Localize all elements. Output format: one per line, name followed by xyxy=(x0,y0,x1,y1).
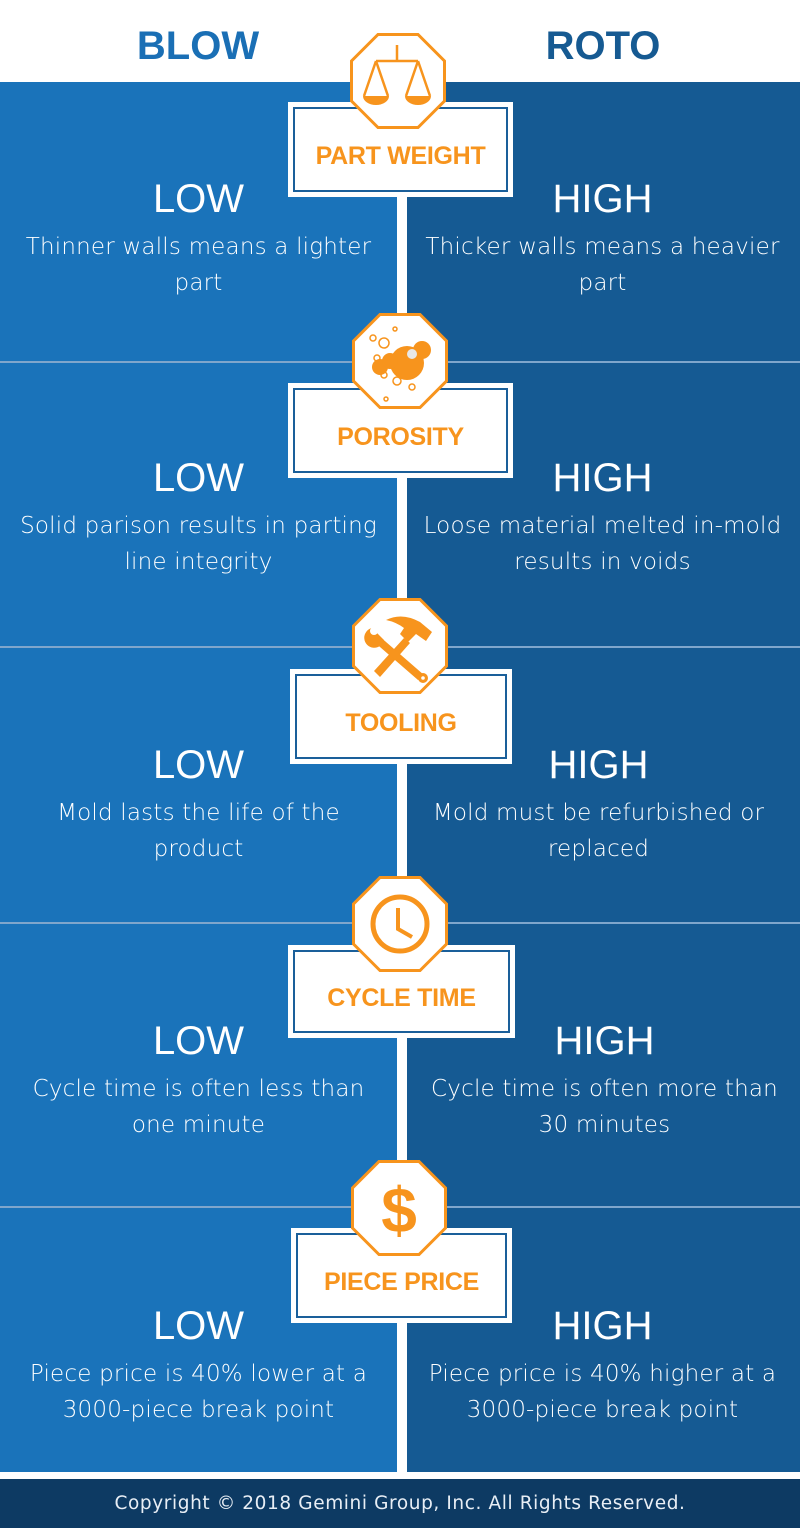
text: roto high: HIGH xyxy=(552,456,652,500)
panel: part weight xyxy=(26,33,780,296)
text: roto high xyxy=(429,1304,776,1423)
text: roto high: HIGH xyxy=(554,1019,654,1063)
label box: piece price xyxy=(291,1228,512,1323)
text: blow low: 3000-piece break point xyxy=(63,1397,334,1423)
icon: scale xyxy=(350,33,446,129)
text: roto high: replaced xyxy=(548,836,649,862)
text: roto high xyxy=(431,1019,778,1138)
text: blow low: LOW xyxy=(153,743,244,787)
text: roto high: HIGH xyxy=(552,1304,652,1348)
label box: porosity xyxy=(288,383,513,478)
text: roto high: Cycle time is often more than xyxy=(431,1076,778,1102)
footer: Copyright © 2018 Gemini Group, Inc. All Rights Reserved. xyxy=(114,1493,686,1514)
label box: tooling: TOOLING xyxy=(345,709,457,737)
text: roto high: part xyxy=(579,270,626,296)
icon: dollar: $ xyxy=(381,1174,417,1246)
text: roto high xyxy=(425,177,780,296)
label box: cycle time: CYCLE TIME xyxy=(327,984,476,1012)
text: blow low: Cycle time is often less than xyxy=(33,1076,364,1102)
icon: bubbles xyxy=(352,313,448,409)
text: blow low: Mold lasts the life of the xyxy=(57,800,340,826)
panel: porosity xyxy=(20,313,781,575)
text: roto high: results in voids xyxy=(514,549,691,575)
text: roto high xyxy=(433,743,764,862)
text: blow low: LOW xyxy=(153,1304,244,1348)
text: roto high: Loose material melted in-mold xyxy=(424,513,781,539)
text: blow low: Piece price is 40% lower at a xyxy=(30,1361,367,1387)
text: blow low: LOW xyxy=(153,1019,244,1063)
header: BLOW: BLOW xyxy=(137,24,259,68)
text: blow low: LOW xyxy=(153,177,244,221)
text: blow low xyxy=(26,177,372,296)
panel: piece price xyxy=(30,1160,776,1423)
text: roto high: 30 minutes xyxy=(539,1112,670,1138)
text: roto high: HIGH xyxy=(548,743,648,787)
panel: tooling xyxy=(57,598,764,862)
text: blow low: one minute xyxy=(132,1112,265,1138)
label box: cycle time xyxy=(288,945,515,1038)
text: roto high: Mold must be refurbished or xyxy=(433,800,764,826)
icon: tools xyxy=(352,598,448,694)
label box: tooling xyxy=(290,669,512,764)
label box: porosity: POROSITY xyxy=(337,423,464,451)
icon: dollar xyxy=(351,1160,447,1256)
header: ROTO: ROTO xyxy=(546,24,660,68)
text: blow low xyxy=(57,743,340,862)
text: blow low xyxy=(30,1304,367,1423)
panel: cycle time xyxy=(33,876,778,1138)
label box: piece price: PIECE PRICE xyxy=(324,1268,479,1296)
text: roto high: Thicker walls means a heavier xyxy=(425,234,780,260)
text: blow low: part xyxy=(175,270,222,296)
footer xyxy=(0,1479,800,1528)
text: roto high xyxy=(424,456,781,575)
label box: part weight: PART WEIGHT xyxy=(316,142,485,170)
icon: clock xyxy=(352,876,448,972)
text: blow low: Thinner walls means a lighter xyxy=(26,234,371,260)
text: roto high: 3000-piece break point xyxy=(467,1397,738,1423)
text: blow low: LOW xyxy=(153,456,244,500)
text: blow low: product xyxy=(154,836,243,862)
text: roto high: Piece price is 40% higher at a xyxy=(429,1361,776,1387)
text: roto high: HIGH xyxy=(552,177,652,221)
text: blow low xyxy=(20,456,377,575)
text: blow low: line integrity xyxy=(124,549,273,575)
text: blow low: Solid parison results in parting xyxy=(20,513,377,539)
text: blow low xyxy=(33,1019,364,1138)
label box: part weight xyxy=(288,102,513,197)
